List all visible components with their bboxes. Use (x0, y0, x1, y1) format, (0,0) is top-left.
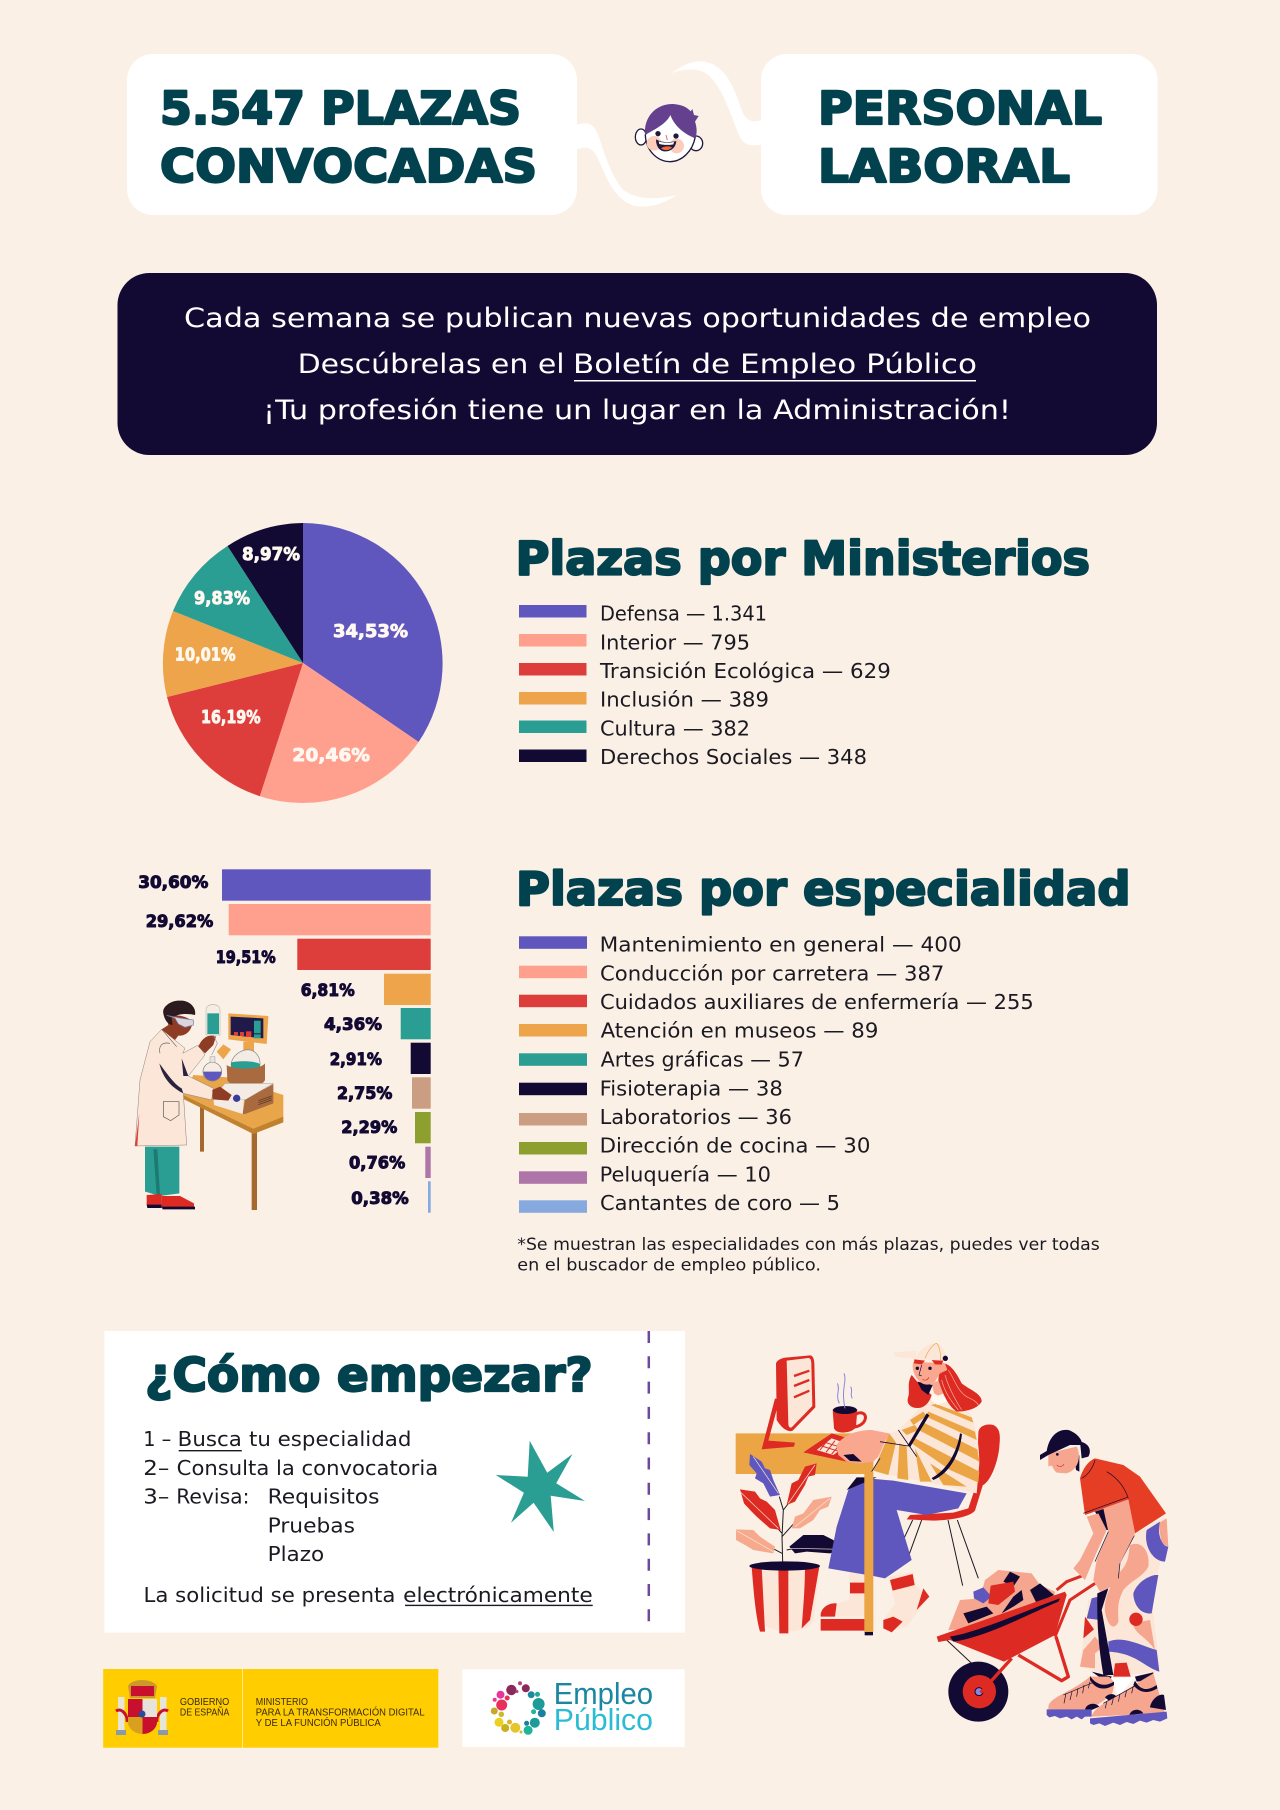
bar chart: plazas por especialidad: 0,76% (349, 1153, 405, 1173)
illustration: scientist at lab table (135, 1001, 283, 1210)
bar chart: plazas por especialidad (138, 869, 431, 1213)
logo: gobierno de espana: GOBIERNO (180, 1697, 229, 1708)
legend: especialidades (519, 933, 1034, 1215)
steps list: Revisa: (176, 1485, 250, 1509)
steps list: tu especialidad (249, 1427, 411, 1451)
steps list: Plazo (268, 1542, 324, 1566)
pie chart: plazas por ministerios: 16,19% (201, 707, 261, 728)
banner: boletin de empleo publico (118, 273, 1157, 455)
steps list (143, 1427, 438, 1566)
illustration: woman at desk and man with wheelbarrow (736, 1343, 1168, 1726)
man upper body (1040, 1430, 1166, 1592)
man pushing wheelbarrow (1047, 1517, 1168, 1726)
title box: personal laboral: PERSONAL (818, 82, 1102, 135)
header: title boxes with mascot (127, 54, 1158, 215)
desk leg (864, 1473, 873, 1632)
logo: gobierno de espana: DE ESPAÑA (180, 1705, 230, 1718)
bar chart: plazas por especialidad: 19,51% (216, 947, 276, 967)
bar chart: plazas por especialidad: 4,36% (324, 1014, 382, 1034)
icon: ring of dots (491, 1681, 546, 1735)
pie chart: plazas por ministerios: 8,97% (242, 544, 300, 565)
pie chart: plazas por ministerios: 20,46% (292, 745, 370, 766)
legend: especialidades: Cantantes de coro — 5 (600, 1191, 840, 1215)
panel: como empezar (104, 1331, 685, 1633)
icon: coat of arms (116, 1680, 168, 1735)
heading: plazas por ministerios: Plazas por Ministerios (516, 532, 1090, 586)
speech tails and mascot face (575, 61, 762, 207)
steps list: 3– (143, 1485, 169, 1509)
legend: especialidades: Mantenimiento en general — 400 (600, 933, 962, 957)
steps list: Busca (178, 1427, 242, 1451)
shoes (1047, 1672, 1167, 1726)
legend: especialidades: Cuidados auxiliares de enfermería — 255 (600, 990, 1034, 1014)
logo: gobierno de espana: PARA LA TRANSFORMACIÓN DIGITAL (256, 1705, 425, 1718)
legend: especialidades: Atención en museos — 89 (601, 1019, 878, 1043)
bar chart: plazas por especialidad: 2,75% (337, 1083, 392, 1103)
banner: boletin de empleo publico: Descúbrelas en el (298, 349, 565, 380)
legend: especialidades: Conducción por carretera — 387 (600, 961, 944, 985)
pie chart: plazas por ministerios (163, 523, 443, 803)
legend: especialidades: Laboratorios — 36 (600, 1105, 792, 1129)
title box: personal laboral (761, 54, 1158, 215)
legend: ministerios: Interior — 795 (600, 630, 750, 654)
footnote (517, 1235, 1100, 1275)
bar chart: plazas por especialidad: 30,60% (138, 872, 208, 892)
steps list: Consulta la convocatoria (177, 1456, 438, 1480)
legend: ministerios: Inclusión — 389 (600, 688, 769, 712)
logo: empleo publico (462, 1669, 685, 1747)
legend: especialidades: Fisioterapia — 38 (600, 1076, 783, 1100)
legend: ministerios: Derechos Sociales — 348 (600, 745, 867, 769)
steps list: 1 – (143, 1427, 171, 1451)
title box: personal laboral: LABORAL (818, 140, 1070, 193)
logo: gobierno de espana: Y DE LA FUNCIÓN PÚBLICA (256, 1716, 381, 1729)
title box: plazas convocadas: CONVOCADAS (160, 140, 537, 193)
closing note: electrónicamente (403, 1583, 593, 1607)
pie chart: plazas por ministerios: 10,01% (175, 645, 236, 666)
steps list: Requisitos (268, 1485, 380, 1509)
legend: especialidades: Dirección de cocina — 30 (600, 1134, 870, 1158)
bar chart: plazas por especialidad: 6,81% (301, 980, 355, 1000)
banner: boletin de empleo publico: Cada semana se publican nuevas oportunidades de empleo (184, 303, 1091, 334)
coffee cup (833, 1373, 865, 1433)
icon: teal star (496, 1441, 585, 1532)
woman at keyboard (803, 1343, 1000, 1632)
logo: gobierno de espana: MINISTERIO (256, 1697, 308, 1708)
logo: gobierno de espana (103, 1669, 438, 1748)
heading: como empezar: ¿Cómo empezar? (145, 1348, 593, 1402)
banner: boletin de empleo publico: ¡Tu profesión tiene un lugar en la Administración! (263, 395, 1011, 426)
legend: ministerios: Defensa — 1.341 (600, 602, 767, 626)
title box: plazas convocadas (127, 54, 577, 215)
closing note (144, 1583, 593, 1607)
bar chart: plazas por especialidad: 29,62% (146, 911, 213, 931)
steps list: Pruebas (268, 1513, 355, 1537)
bar chart: plazas por especialidad: 2,29% (341, 1117, 397, 1137)
banner: boletin de empleo publico: Boletín de Empleo Público (573, 349, 977, 380)
pie chart: plazas por ministerios: 34,53% (333, 621, 408, 642)
legend: ministerios: Cultura — 382 (600, 716, 750, 740)
legend: especialidades: Peluquería — 10 (600, 1162, 771, 1186)
logo: empleo publico: Empleo (554, 1676, 653, 1711)
steps list: 2– (143, 1456, 169, 1480)
legend: especialidades: Artes gráficas — 57 (601, 1048, 804, 1072)
plant and pot (736, 1454, 843, 1633)
footnote: en el buscador de empleo público. (517, 1256, 821, 1275)
closing note: La solicitud se presenta (144, 1583, 395, 1607)
heading: plazas por especialidad: Plazas por especialidad (516, 862, 1130, 916)
monitor (762, 1355, 815, 1449)
logo: empleo publico: Público (554, 1702, 653, 1737)
wheelbarrow (937, 1570, 1095, 1722)
bar chart: plazas por especialidad: 2,91% (330, 1049, 382, 1069)
title box: plazas convocadas: 5.547 PLAZAS (160, 82, 521, 135)
pie chart: plazas por ministerios: 9,83% (194, 588, 250, 609)
patterned trousers (1080, 1517, 1168, 1677)
legend: ministerios: Transición Ecológica — 629 (599, 659, 891, 683)
footnote: *Se muestran las especialidades con más plazas, puedes ver todas (517, 1235, 1100, 1254)
bar chart: plazas por especialidad: 0,38% (351, 1188, 409, 1208)
desk (736, 1433, 873, 1474)
legend: ministerios (519, 602, 891, 769)
